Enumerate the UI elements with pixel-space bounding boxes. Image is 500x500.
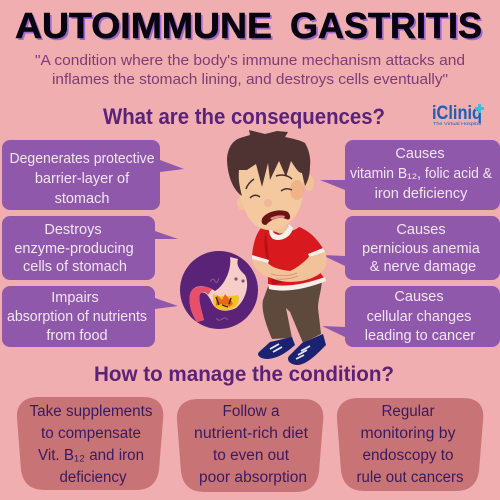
shirt: [252, 227, 325, 288]
panel: pernicious anemia: [322, 216, 500, 280]
panel: supplements: [17, 397, 163, 490]
legs: [263, 278, 322, 343]
arms: [252, 252, 327, 282]
closed eyes and brows: [246, 175, 292, 198]
panel: diet: nutrient-rich diet: [194, 425, 309, 442]
subtitle quote: [35, 52, 465, 88]
panel: cellular changes: Causes: [394, 289, 444, 305]
panel: diet: poor absorption: [199, 469, 307, 486]
panel: vitamin deficiency: [320, 140, 500, 210]
subtitle quote: inflames the stomach lining, and destroys cells eventually": [52, 71, 448, 88]
panel: impairs absorption: Impairs: [51, 290, 99, 306]
panel: degenerates barrier: [2, 140, 184, 210]
logo: iCliniq: iCliniq: [432, 103, 482, 124]
panel: supplements: Take supplements: [30, 403, 153, 420]
hair: [227, 130, 310, 196]
panel: monitoring: endoscopy to: [362, 447, 454, 464]
panel: vitamin deficiency: iron deficiency: [375, 186, 468, 202]
title: AUTOIMMUNE: [17, 7, 274, 48]
panel: pernicious anemia: pernicious anemia: [362, 241, 481, 257]
collar: [269, 224, 293, 240]
panel: supplements: to compensate: [41, 425, 141, 442]
panel: monitoring: rule out cancers: [356, 469, 464, 486]
shirt hems: [268, 277, 326, 291]
mouth: [262, 210, 290, 225]
panel: monitoring: [337, 398, 483, 491]
panel: destroys enzyme cells: Destroys: [44, 222, 102, 238]
panel: impairs absorption: absorption of nutrients: [7, 309, 147, 325]
panel: destroys enzyme cells: [2, 216, 178, 280]
title: GASTRITIS: [292, 7, 484, 48]
nose: [264, 199, 272, 207]
panel: pernicious anemia: & nerve damage: [370, 259, 476, 275]
logo: iCliniq: The Virtual Hospital: [433, 121, 481, 126]
panel: cellular changes: [322, 286, 500, 347]
shoes: [258, 334, 326, 365]
panel: degenerates barrier: barrier-layer of: [35, 171, 130, 187]
subtitle quote: "A condition where the body's immune mechanism attacks and: [35, 52, 465, 69]
panel: diet: [177, 399, 323, 492]
illustration: boy holding stomach: [227, 130, 327, 365]
panel: impairs absorption: from food: [46, 328, 108, 344]
panel: cellular changes: cellular changes: [367, 309, 471, 325]
illustration: stomach in circle: [180, 251, 258, 329]
panel: diet: Follow a: [222, 403, 280, 420]
panel: supplements: deficiency: [60, 469, 127, 486]
panel: destroys enzyme cells: cells of stomach: [23, 259, 127, 275]
panel: diet: to even out: [213, 447, 290, 464]
panel: monitoring: Regular: [382, 403, 434, 420]
face: [238, 153, 303, 230]
panel: vitamin deficiency: Causes: [395, 146, 445, 162]
title: GASTRITIS: [290, 5, 482, 46]
panel: monitoring: monitoring by: [360, 425, 456, 442]
panel: impairs absorption: [2, 286, 178, 347]
panel: degenerates barrier: stomach: [55, 191, 109, 207]
panel: vitamin deficiency: vitamin B₁₂, folic acid &: [350, 166, 492, 182]
panel: cellular changes: leading to cancer: [365, 328, 475, 344]
panel: pernicious anemia: Causes: [396, 222, 446, 238]
ears: [237, 196, 247, 210]
title: AUTOIMMUNE: [15, 5, 272, 46]
heading: manage: How to manage the condition?: [94, 362, 394, 386]
panel: destroys enzyme cells: enzyme-producing: [14, 241, 134, 257]
panel: degenerates barrier: Degenerates protective: [10, 151, 154, 167]
heading: consequences: What are the consequences?: [103, 104, 385, 129]
title: [15, 5, 484, 48]
panel: supplements: Vit. B₁₂ and iron: [38, 447, 144, 464]
